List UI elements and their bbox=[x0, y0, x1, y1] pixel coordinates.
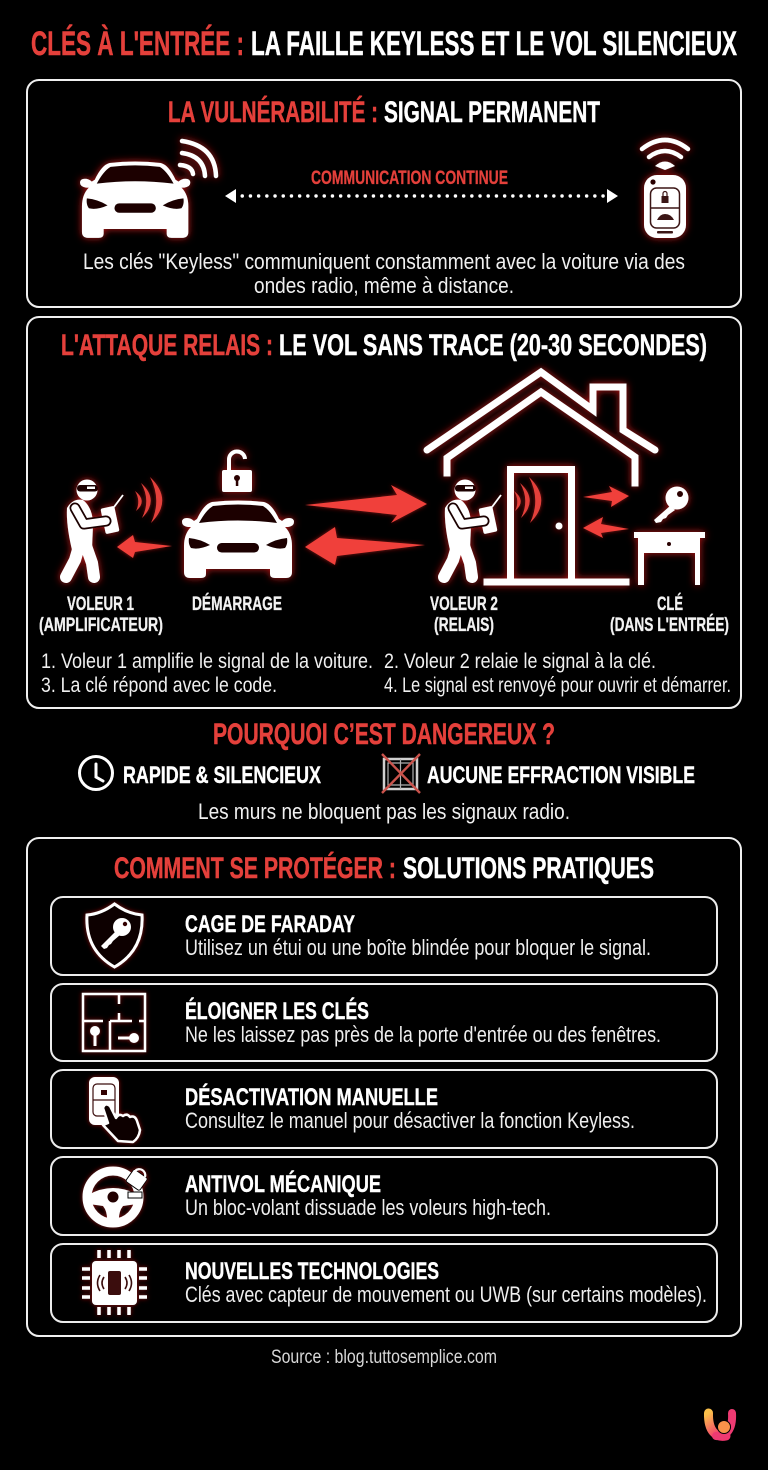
text: attack steps: 1. Voleur 1 amplifie le signal de la voiture. bbox=[41, 650, 373, 673]
card: éloigner les clés bbox=[51, 984, 717, 1061]
icon: house bbox=[427, 372, 655, 582]
text: éloigner: ÉLOIGNER LES CLÉS bbox=[185, 997, 369, 1025]
arrow: car to voleur 1 bbox=[117, 535, 172, 558]
card: nouvelles technologies bbox=[51, 1244, 717, 1322]
text: désactivation: Consultez le manuel pour désactiver la fonction Keyless. bbox=[185, 1108, 635, 1133]
icon: key on table bbox=[634, 486, 705, 585]
labels: actors: VOLEUR 1 bbox=[67, 594, 134, 615]
labels: actors bbox=[39, 593, 729, 636]
card: antivol mécanique bbox=[51, 1157, 717, 1235]
title bbox=[31, 25, 737, 63]
heading: vulnérabilité: LA VULNÉRABILITÉ : bbox=[168, 95, 378, 129]
panel: se protéger bbox=[27, 838, 741, 1336]
arrow: relais to key bbox=[583, 486, 629, 507]
labels: actors: (AMPLIFICATEUR) bbox=[39, 615, 163, 636]
heading: vulnérabilité bbox=[168, 95, 600, 129]
text: nouvelles technologies: NOUVELLES TECHNOLOGIES bbox=[185, 1258, 439, 1285]
arrow: voleur 2 to car bbox=[305, 527, 425, 565]
icon: key fob with signal bbox=[642, 140, 688, 238]
source: Source : blog.tuttosemplice.com bbox=[271, 1347, 497, 1368]
label: communication continue: COMMUNICATION CONTINUE bbox=[311, 168, 508, 189]
text: cage de faraday: CAGE DE FARADAY bbox=[185, 911, 355, 938]
icon: steering wheel with lock bbox=[87, 1169, 148, 1224]
arrow: key to relais bbox=[583, 517, 629, 538]
text: walls: Les murs ne bloquent pas les signaux radio. bbox=[198, 799, 570, 824]
text: keyless explanation: ondes radio, même à distance. bbox=[254, 273, 514, 298]
text: attack steps bbox=[41, 650, 731, 697]
text: rapide: RAPIDE & SILENCIEUX bbox=[123, 762, 321, 789]
text: cage de faraday: Utilisez un étui ou une boîte blindée pour bloquer le signal. bbox=[185, 935, 651, 960]
icon: voleur 2 bbox=[444, 480, 501, 577]
heading: pourquoi: POURQUOI C’EST DANGEREUX ? bbox=[213, 718, 555, 751]
card: désactivation manuelle bbox=[51, 1070, 717, 1148]
icon: car with signal bbox=[80, 141, 216, 238]
heading: vulnérabilité: SIGNAL PERMANENT bbox=[384, 96, 600, 129]
section: pourquoi c'est dangereux bbox=[80, 718, 695, 824]
text: keyless explanation: Les clés "Keyless" communiquent constamment avec la voiture via des bbox=[83, 249, 685, 274]
icon: logo bbox=[708, 1413, 732, 1436]
text: désactivation: DÉSACTIVATION MANUELLE bbox=[185, 1083, 438, 1111]
icon: shield with key bbox=[87, 904, 142, 967]
heading: se protéger: COMMENT SE PROTÉGER : bbox=[114, 851, 396, 885]
labels: actors: DÉMARRAGE bbox=[192, 593, 282, 615]
text: antivol: ANTIVOL MÉCANIQUE bbox=[185, 1170, 381, 1198]
text: éloigner: Ne les laissez pas près de la porte d'entrée ou des fenêtres. bbox=[185, 1022, 661, 1047]
panel: attaque relais bbox=[27, 317, 741, 708]
icon: floor plan with keys bbox=[83, 994, 145, 1051]
heading: attaque relais: L'ATTAQUE RELAIS : bbox=[61, 329, 273, 362]
icon: signal waves 1 bbox=[135, 477, 162, 523]
heading: attaque relais bbox=[61, 329, 707, 362]
labels: actors: VOLEUR 2 bbox=[430, 594, 498, 615]
text: antivol bbox=[185, 1170, 551, 1220]
text: attack steps: 2. Voleur 2 relaie le signal à la clé. bbox=[384, 650, 656, 673]
labels: actors: (RELAIS) bbox=[434, 615, 494, 636]
icon: chip with phone bbox=[82, 1250, 147, 1315]
icon: voleur 1 bbox=[66, 480, 123, 577]
icon: crossed window bbox=[382, 754, 420, 793]
text: cage de faraday bbox=[185, 911, 651, 960]
text: antivol: Un bloc-volant dissuade les voleurs high-tech. bbox=[185, 1195, 551, 1220]
card: cage de faraday bbox=[51, 897, 717, 975]
text: nouvelles technologies bbox=[185, 1258, 707, 1307]
icon: car with open lock bbox=[182, 451, 294, 578]
text: keyless explanation bbox=[83, 249, 685, 298]
labels: actors: CLÉ bbox=[657, 593, 683, 615]
arrow: two-way dotted bbox=[225, 189, 618, 203]
icon: signal waves 2 bbox=[514, 477, 541, 523]
arrow: car to voleur 2 bbox=[305, 485, 427, 523]
text: éloigner bbox=[185, 997, 661, 1047]
heading: se protéger: SOLUTIONS PRATIQUES bbox=[403, 852, 654, 885]
icon: clock bbox=[80, 756, 112, 790]
text: désactivation bbox=[185, 1083, 635, 1133]
icon: fob with hand bbox=[89, 1077, 140, 1142]
title: CLÉS À L'ENTRÉE : bbox=[31, 25, 244, 63]
panel: la vulnérabilité bbox=[27, 80, 741, 307]
text: attack steps: 3. La clé répond avec le code. bbox=[41, 674, 277, 697]
